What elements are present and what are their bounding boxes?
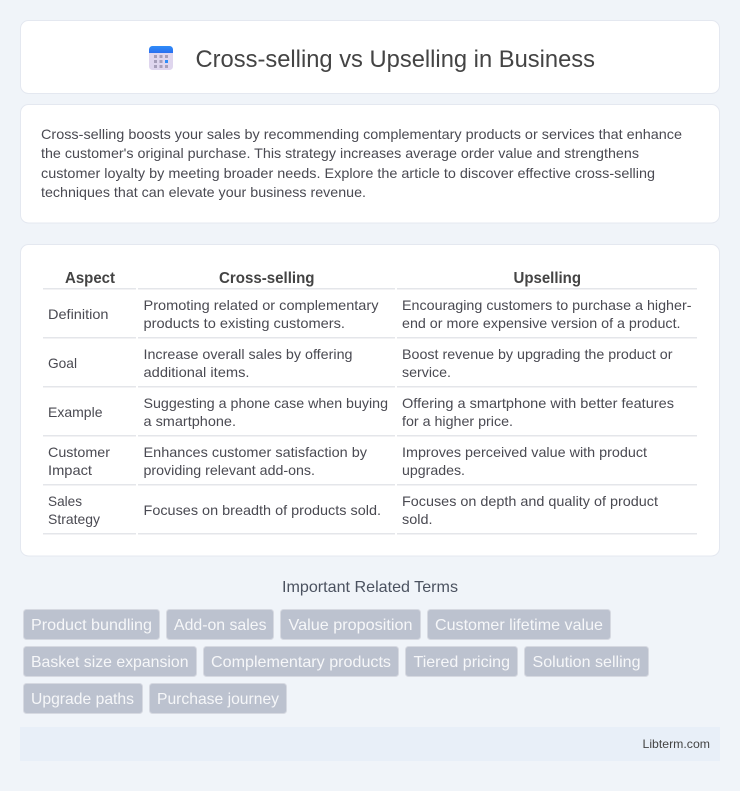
- table row: sales strategy: Focuses on depth and quality of product: [402, 493, 658, 509]
- tag: product bundling: [24, 610, 160, 640]
- icon: calendar: [149, 46, 173, 70]
- table row: customer impact: upgrades.: [402, 462, 465, 478]
- table row: sales strategy: sold.: [402, 511, 432, 527]
- tag: upgrade paths: Upgrade paths: [31, 691, 134, 708]
- tag: customer lifetime value: Customer lifetime value: [435, 617, 603, 634]
- tag: value proposition: Value proposition: [288, 617, 412, 634]
- table row: example: Suggesting a phone case when buying: [144, 395, 388, 411]
- panel: introduction: [20, 104, 720, 223]
- tag: tiered pricing: [406, 646, 518, 676]
- table row: customer impact: Impact: [48, 462, 92, 478]
- text block: introduction paragraph: [41, 126, 682, 200]
- table row: customer impact: Enhances customer satisfaction by: [144, 444, 367, 460]
- tag: product bundling: Product bundling: [31, 617, 152, 634]
- tag: purchase journey: Purchase journey: [157, 691, 279, 708]
- tag: solution selling: Solution selling: [532, 654, 640, 671]
- table header: Aspect: [65, 270, 116, 287]
- tag: basket size expansion: Basket size expansion: [31, 654, 188, 671]
- table row: sales strategy: Strategy: [48, 511, 100, 527]
- tag: upgrade paths: [24, 684, 142, 714]
- title: Cross-selling vs Upselling in Business: [196, 46, 595, 73]
- table header: [65, 270, 581, 287]
- tag: basket size expansion: [24, 646, 196, 676]
- tag: add-on sales: Add-on sales: [174, 617, 266, 634]
- table row: goal: additional items.: [144, 364, 250, 380]
- tag: add-on sales: [166, 610, 274, 640]
- table row: definition: [48, 297, 692, 331]
- table row: customer impact: [48, 444, 647, 478]
- text block: introduction paragraph: techniques that can elevate your business revenue.: [41, 184, 366, 200]
- table row: definition: products to existing customers.: [144, 315, 345, 331]
- table row: example: Offering a smartphone with better features: [402, 395, 674, 411]
- table row: goal: Boost revenue by upgrading the product or: [402, 346, 673, 362]
- table row: example: for a higher price.: [402, 413, 513, 429]
- table row: customer impact: Customer: [48, 444, 110, 460]
- table row: sales strategy: Focuses on breadth of products sold.: [144, 502, 381, 518]
- table header: Upselling: [514, 270, 581, 287]
- table row: sales strategy: Sales: [48, 493, 82, 509]
- table row: definition: Definition: [48, 306, 108, 322]
- table header: Cross-selling: [219, 270, 314, 287]
- tag: customer lifetime value: [428, 610, 610, 640]
- heading: important related terms: Important Related Terms: [282, 579, 458, 596]
- table row: definition: Promoting related or complementary: [144, 297, 378, 313]
- table row: goal: [48, 346, 673, 380]
- tag: value proposition: [280, 610, 420, 640]
- table row: customer impact: providing relevant add-ons.: [144, 462, 315, 478]
- table row: customer impact: Improves perceived value with product: [402, 444, 647, 460]
- table row: definition: end or more expensive version of a product.: [402, 315, 680, 331]
- panel: related term tags: [24, 610, 648, 714]
- text block: introduction paragraph: the customer's original purchase. This strategy increases average order value and strengthens: [41, 145, 639, 161]
- tag: solution selling: [524, 646, 648, 676]
- table row: goal: service.: [402, 364, 451, 380]
- table row: definition: Encouraging customers to purchase a higher-: [402, 297, 692, 313]
- tag: complementary products: Complementary products: [211, 654, 391, 671]
- panel: comparison table: [20, 244, 720, 556]
- panel: title card: [20, 20, 720, 94]
- text block: introduction paragraph: customer loyalty by meeting broader needs. Explore the article to discover effective cross-selling: [41, 165, 655, 181]
- table row: example: [48, 395, 674, 429]
- table row: example: Example: [48, 404, 103, 420]
- footer: Libterm.com: [642, 737, 710, 751]
- text block: introduction paragraph: Cross-selling boosts your sales by recommending complementary products or services that enhance: [41, 126, 682, 142]
- footer: [20, 727, 720, 761]
- tag: tiered pricing: Tiered pricing: [414, 654, 510, 671]
- tag: complementary products: [204, 646, 398, 676]
- tag: purchase journey: [150, 684, 286, 714]
- table row: goal: Goal: [48, 355, 77, 371]
- table row: goal: Increase overall sales by offering: [144, 346, 352, 362]
- table row: sales strategy: [48, 493, 658, 527]
- table row: example: a smartphone.: [144, 413, 236, 429]
